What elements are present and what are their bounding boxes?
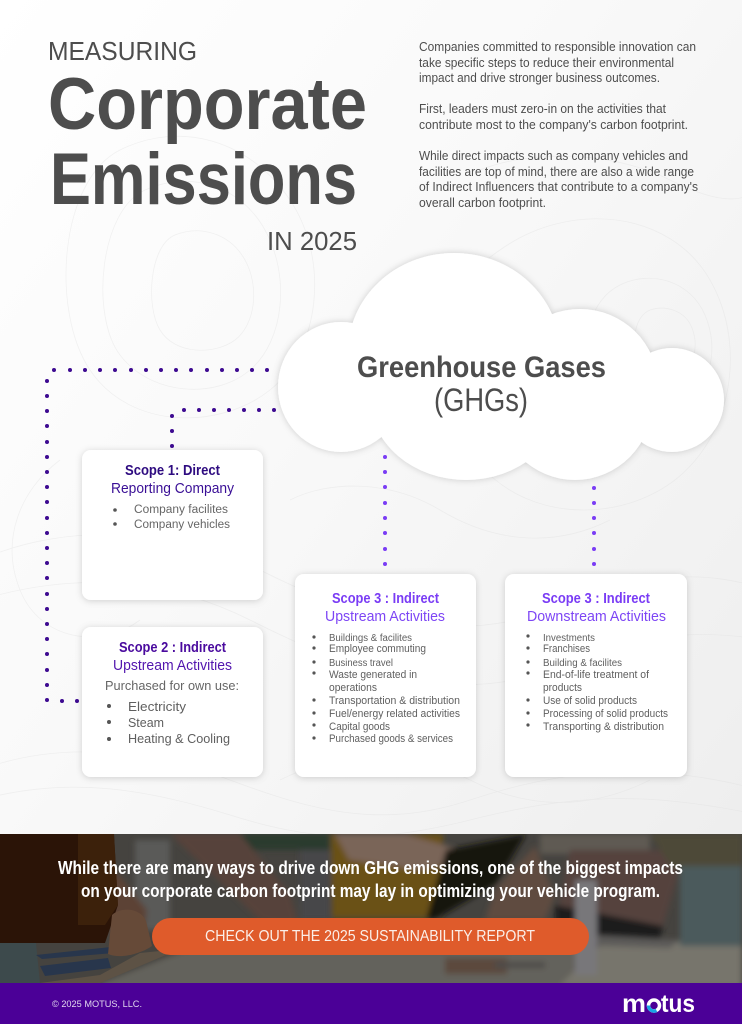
- intro text: While direct impacts such as company vehicles and: [419, 148, 688, 163]
- panel: scope 3 downstream: Processing of solid products: [543, 708, 668, 720]
- panel: scope 2 indirect: Upstream Activities: [113, 657, 232, 674]
- title: [48, 36, 367, 256]
- button: sustainability report: CHECK OUT THE 2025 SUSTAINABILITY REPORT: [205, 928, 535, 945]
- panel: scope 2 indirect: Purchased for own use:: [105, 678, 239, 693]
- logo: motus: [622, 990, 695, 1018]
- copyright: © 2025 MOTUS, LLC.: [52, 999, 142, 1010]
- intro text: facilities are top of mind, there are also a wide range: [419, 164, 694, 179]
- panel: scope 3 upstream: Upstream Activities: [325, 608, 445, 625]
- panel: scope 2 indirect: Electricity: [128, 699, 187, 714]
- cloud: greenhouse gases: [278, 253, 724, 480]
- intro text: overall carbon footprint.: [419, 195, 546, 210]
- panel: scope 3 downstream: Use of solid products: [543, 695, 637, 707]
- title: Corporate: [48, 64, 367, 145]
- panel: scope 3 downstream: Downstream Activities: [527, 608, 666, 625]
- panel: scope 3 downstream: Scope 3 : Indirect: [542, 591, 650, 607]
- intro text: contribute most to the company's carbon footprint.: [419, 117, 688, 132]
- cloud: greenhouse gases: (GHGs): [434, 382, 528, 418]
- title: Emissions: [50, 139, 357, 220]
- photo banner: hands over a table: [0, 834, 742, 990]
- dotted connector: scope 3 upstream: [383, 455, 387, 566]
- logo: motus: tus: [661, 990, 695, 1018]
- callout text: on your corporate carbon footprint may lay in optimizing your vehicle program.: [81, 881, 660, 901]
- panel: scope 3 upstream: Waste generated in: [329, 669, 417, 681]
- panel: scope 3 upstream: operations: [329, 682, 377, 694]
- panel: scope 3 downstream: [505, 574, 687, 777]
- panel: scope 3 downstream: Investments: [543, 633, 595, 644]
- panel: scope 1 direct: Company vehicles: [134, 519, 230, 531]
- panel: scope 3 downstream: End-of-life treatment of: [543, 669, 650, 681]
- panel: scope 3 upstream: Capital goods: [329, 721, 390, 733]
- panel: scope 3 upstream: Business travel: [329, 658, 393, 669]
- panel: scope 1 direct: Reporting Company: [111, 480, 234, 497]
- intro text: impact and drive stronger business outcomes.: [419, 70, 660, 85]
- logo: motus: m: [622, 990, 646, 1018]
- button: sustainability report: [152, 918, 589, 955]
- intro text: of Indirect Influencers that contribute to a company's: [419, 179, 698, 194]
- cloud: greenhouse gases: Greenhouse Gases: [357, 351, 606, 384]
- panel: scope 3 upstream: Scope 3 : Indirect: [332, 591, 439, 607]
- title: MEASURING: [48, 36, 197, 66]
- panel: scope 3 upstream: Buildings & facilites: [329, 633, 412, 644]
- panel: scope 3 upstream: Purchased goods & services: [329, 733, 453, 745]
- panel: scope 3 downstream: products: [543, 682, 582, 694]
- dotted connector: scope 1: [170, 408, 276, 448]
- panel: scope 3 downstream: Transporting & distribution: [543, 721, 664, 733]
- panel: scope 3 upstream: Employee commuting: [329, 643, 426, 655]
- intro text: First, leaders must zero-in on the activities that: [419, 101, 666, 116]
- title: IN 2025: [267, 226, 357, 256]
- dotted connector: scope 2: [45, 368, 269, 703]
- panel: scope 1 direct: Company facilites: [134, 504, 228, 516]
- panel: scope 1 direct: [82, 450, 263, 600]
- intro text: take specific steps to reduce their environmental: [419, 55, 674, 70]
- panel: scope 3 downstream: Building & facilites: [543, 658, 622, 669]
- intro text: Companies committed to responsible innovation can: [419, 39, 696, 54]
- panel: scope 2 indirect: Scope 2 : Indirect: [119, 640, 226, 656]
- panel: scope 3 upstream: Fuel/energy related activities: [329, 708, 460, 720]
- dotted connector: scope 3 downstream: [592, 486, 596, 566]
- panel: scope 3 downstream: Franchises: [543, 643, 590, 655]
- panel: scope 3 upstream: Transportation & distribution: [329, 695, 460, 707]
- footer bar: [0, 983, 742, 1024]
- panel: scope 2 indirect: Heating & Cooling: [128, 731, 230, 746]
- callout text: [58, 858, 683, 901]
- panel: scope 2 indirect: [82, 627, 263, 777]
- panel: scope 1 direct: Scope 1: Direct: [125, 463, 220, 479]
- intro text: [419, 39, 698, 210]
- panel: scope 2 indirect: Steam: [128, 715, 164, 730]
- panel: scope 3 upstream: [295, 574, 476, 777]
